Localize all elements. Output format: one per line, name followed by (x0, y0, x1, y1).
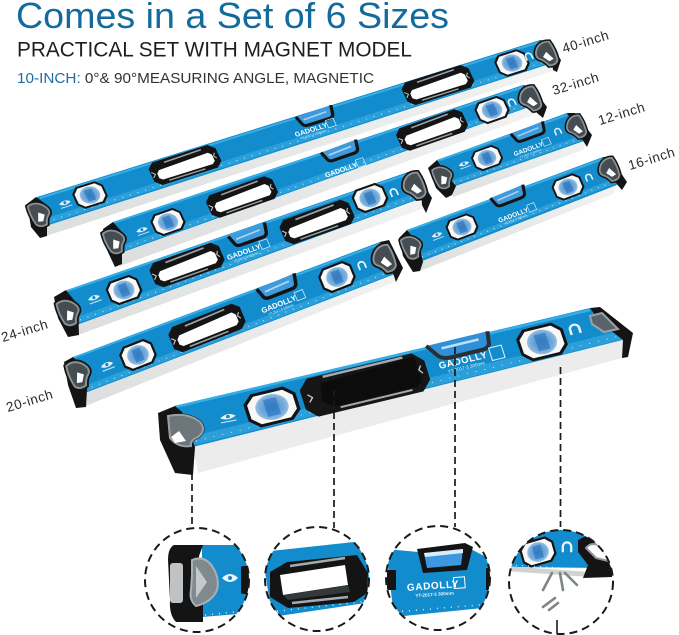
round vial (513, 321, 571, 363)
eye icon (58, 199, 72, 208)
24-inch level (54, 171, 432, 337)
top vial (490, 185, 528, 208)
brand: YT-2017-3 800mm (331, 169, 356, 181)
round vial (70, 179, 110, 211)
round vial (443, 211, 481, 243)
subtitle: PRACTICAL SET WITH MAGNET MODEL (17, 38, 412, 62)
brand: YT-2017-3 300mm (447, 360, 486, 374)
magnet icon (389, 188, 398, 197)
round vial (492, 47, 532, 79)
handle (297, 351, 433, 419)
brand: YT-2017-3 300mm (519, 147, 543, 159)
silver base (43, 63, 553, 237)
brand (293, 118, 338, 142)
silver base (453, 140, 587, 197)
large 12-inch detail level (158, 307, 633, 475)
body (175, 308, 623, 447)
label 20-inch: 20-inch (4, 386, 55, 415)
round vial (103, 273, 145, 307)
12-inch level (428, 113, 592, 198)
magnet icon (524, 52, 533, 61)
brand: GADOLLY (407, 579, 459, 594)
label 16-inch: 16-inch (626, 144, 677, 173)
round vial (472, 94, 512, 126)
detail circle: top vial and brand (386, 526, 494, 630)
brand (437, 345, 506, 376)
right end cap (540, 40, 561, 72)
magnet icon (357, 261, 366, 270)
32-inch level (101, 85, 547, 267)
round vial (349, 181, 391, 215)
left end cap (103, 222, 122, 267)
40-inch level (26, 40, 561, 238)
silver base (193, 340, 623, 473)
brand: GADOLLY (294, 122, 329, 139)
body (113, 85, 535, 254)
16-inch level (399, 157, 627, 272)
silver base (80, 273, 398, 407)
left end cap (54, 290, 79, 337)
left end cap (27, 197, 47, 238)
top vial (510, 121, 547, 143)
silver base (420, 185, 617, 271)
round vial (469, 143, 505, 173)
detail circle: handle (262, 527, 372, 631)
handle (204, 174, 280, 220)
handle (166, 301, 248, 355)
body (67, 172, 425, 325)
round vial (148, 206, 188, 238)
magnet icon (569, 324, 581, 335)
brand: GADOLLY (437, 350, 489, 372)
eye icon (431, 231, 444, 240)
left end cap (428, 160, 456, 198)
screws (543, 573, 577, 610)
body (407, 157, 617, 262)
left end cap (64, 357, 88, 408)
eye icon (100, 360, 115, 371)
label 24-inch: 24-inch (0, 316, 50, 345)
handle (399, 63, 477, 107)
brand: YT-2017-3 600mm (233, 251, 260, 263)
size labels (0, 27, 677, 415)
top vial (295, 105, 336, 127)
handle (147, 241, 227, 289)
brand: GADOLLY (260, 293, 298, 315)
eye icon (87, 293, 102, 304)
round vial (117, 336, 159, 374)
right end cap (380, 240, 403, 282)
brand: GADOLLY (513, 141, 545, 158)
brand: YT-2017-3 500mm (268, 303, 295, 317)
right end cap (408, 172, 432, 213)
brand (260, 290, 307, 318)
round vial (241, 384, 303, 430)
brand (406, 577, 466, 599)
feature line: 10-INCH: 0°& 90°MEASURING ANGLE, MAGNETIC (17, 70, 374, 87)
brand: GADOLLY (324, 162, 359, 179)
brand: YT-2017-3 400mm (504, 213, 528, 226)
left end cap (158, 406, 195, 475)
body (37, 40, 553, 227)
brand: YT-2017-3 300mm (415, 591, 454, 598)
eye icon (220, 413, 237, 423)
round vial (549, 171, 587, 203)
brand: GADOLLY (225, 242, 262, 262)
detail circle: end cap (145, 528, 250, 632)
brand (512, 137, 553, 160)
eye icon (135, 226, 149, 236)
handle (277, 198, 357, 246)
magnet icon (507, 98, 516, 107)
label 32-inch: 32-inch (550, 69, 601, 98)
callout dashed leaders (192, 347, 560, 528)
right end cap (603, 157, 627, 190)
label 12-inch: 12-inch (596, 99, 647, 128)
right end cap (590, 307, 633, 358)
brand (323, 158, 368, 182)
top vial (228, 223, 270, 248)
magnet icon (585, 174, 593, 182)
left end cap (399, 230, 423, 272)
top vial (426, 331, 493, 362)
round vial (316, 258, 358, 296)
top vial (321, 140, 361, 163)
right end cap (567, 113, 592, 147)
brand (225, 239, 272, 265)
body (437, 113, 587, 187)
brand (497, 203, 538, 227)
eye icon (458, 160, 471, 169)
brand: YT-2017-3 1000mm (300, 129, 327, 140)
silver base (77, 197, 427, 335)
right end cap (523, 85, 547, 118)
silver base (118, 105, 537, 266)
detail circle: magnet holding screws (505, 527, 613, 634)
handle (146, 143, 224, 187)
brand: GADOLLY (497, 207, 530, 225)
magnet icon (554, 128, 562, 135)
body (73, 242, 398, 395)
handle (394, 107, 470, 153)
label 40-inch: 40-inch (560, 27, 611, 56)
20-inch level (64, 240, 403, 408)
top vial (256, 273, 299, 301)
